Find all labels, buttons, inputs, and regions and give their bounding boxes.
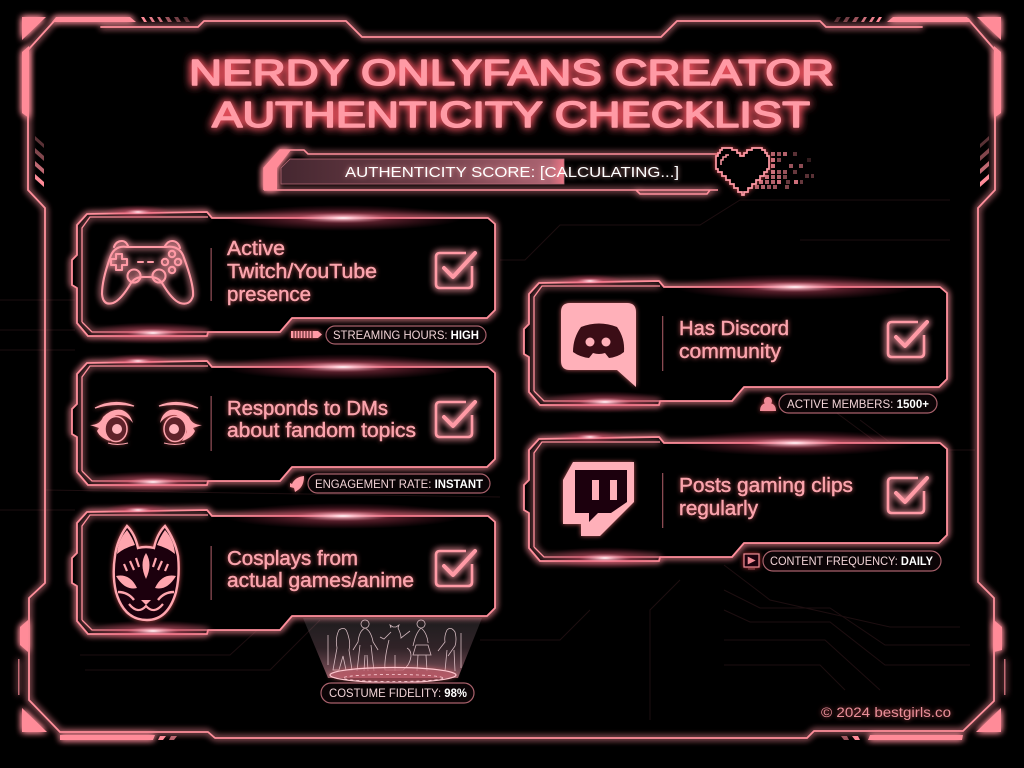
- projector disc: [330, 668, 456, 682]
- icon: checkbox: [888, 478, 927, 513]
- cosplay figures: [328, 620, 461, 671]
- label: actual games/anime: [227, 569, 414, 592]
- frame lines: [101, 21, 922, 37]
- label: Active: [227, 237, 285, 260]
- icon: battery gauge: [291, 331, 322, 338]
- authenticity score bar: [264, 148, 814, 195]
- panel: responds to DMs: [72, 354, 495, 493]
- title: [189, 52, 834, 135]
- label: [227, 237, 377, 306]
- footer copyright: © 2024 bestgirls.co: [821, 704, 951, 720]
- stat: streaming hours: [291, 326, 486, 344]
- label: regularly: [679, 497, 759, 520]
- background circuit traces: [0, 200, 975, 720]
- icon: person: [760, 397, 776, 411]
- stat: streaming hours: STREAMING HOURS: HIGH: [333, 328, 479, 342]
- divider: [210, 396, 212, 451]
- icon: checkbox: [436, 551, 475, 586]
- icon: checkbox: [888, 322, 927, 357]
- stat: costume fidelity: [321, 683, 474, 703]
- stat: active members: [760, 394, 937, 413]
- label: [679, 317, 789, 363]
- stat: content frequency: [744, 551, 941, 571]
- divider: [210, 546, 212, 600]
- panel: Twitch/YouTube presence: [72, 205, 495, 344]
- stat: costume fidelity: COSTUME FIDELITY: 98%: [329, 686, 467, 700]
- stat: engagement rate: [290, 474, 490, 493]
- label: Cosplays from: [227, 547, 358, 570]
- panel: cosplay: [72, 503, 495, 642]
- icon: pixel heart: [716, 148, 814, 195]
- icon: rocket: [290, 476, 304, 492]
- icon: play screen: [744, 554, 759, 569]
- label: Has Discord: [679, 317, 789, 340]
- title: NERDY ONLYFANS CREATOR: [189, 52, 834, 93]
- label: community: [679, 340, 782, 363]
- label: [227, 397, 416, 442]
- icon: twitch: [563, 462, 634, 536]
- icon: discord: [561, 303, 636, 387]
- divider: [210, 248, 212, 301]
- label: Twitch/YouTube: [227, 260, 377, 283]
- label: presence: [227, 283, 311, 306]
- label: Posts gaming clips: [679, 474, 853, 497]
- divider: [662, 473, 663, 528]
- icon: checkbox: [436, 402, 475, 437]
- divider: [662, 316, 663, 371]
- panel: Discord community: [524, 274, 947, 413]
- label: [227, 547, 414, 592]
- stat: engagement rate: ENGAGEMENT RATE: INSTANT: [315, 477, 484, 491]
- icon: checkbox: [436, 253, 475, 288]
- label: Responds to DMs: [227, 397, 388, 420]
- label: [679, 474, 853, 520]
- icon: game controller: [102, 241, 193, 304]
- hologram projector: [303, 618, 482, 703]
- stat: active members: ACTIVE MEMBERS: 1500+: [787, 397, 929, 411]
- title: AUTHENTICITY CHECKLIST: [212, 94, 810, 135]
- score text: AUTHENTICITY SCORE: [CALCULATING...]: [345, 164, 679, 181]
- icon: kitsune mask: [114, 526, 179, 620]
- icon: anime eyes: [90, 402, 202, 444]
- stat: content frequency: CONTENT FREQUENCY: DAILY: [770, 554, 933, 568]
- panel: gaming clips: [524, 430, 947, 569]
- label: about fandom topics: [227, 419, 416, 442]
